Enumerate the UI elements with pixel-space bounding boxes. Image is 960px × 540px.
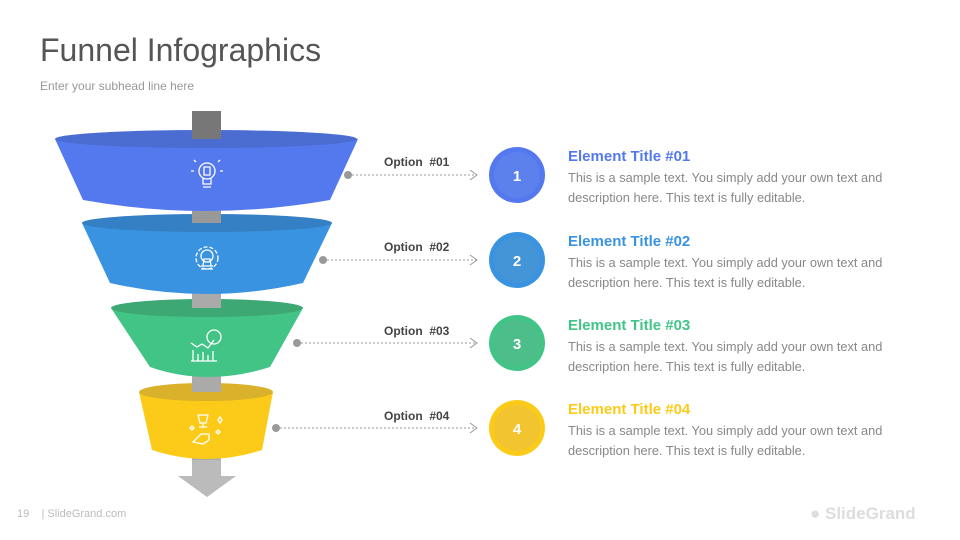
funnel level 1 — [55, 111, 358, 211]
icon: chart — [191, 330, 221, 361]
text: This is a sample text. You simply add your own text and description here. This text is fully editable. — [568, 255, 882, 290]
logo: ● SlideGrand — [810, 504, 916, 523]
title: Funnel Infographics — [40, 32, 321, 68]
text: Option #01 — [384, 155, 449, 169]
number circles: 2 — [513, 253, 521, 270]
number circles: 3 — [513, 336, 521, 353]
icon: trophy hand — [190, 415, 222, 444]
icon: lightbulb — [191, 160, 223, 187]
text: This is a sample text. You simply add your own text and description here. This text is fully editable. — [568, 339, 882, 374]
element 3 text — [568, 317, 882, 374]
icon: gear chess — [196, 247, 218, 269]
connectors — [272, 170, 477, 433]
pole — [192, 111, 221, 461]
element 2 text — [568, 233, 882, 290]
funnel level 3 — [111, 295, 303, 377]
text: Element Title #04 — [568, 401, 690, 418]
element 4 text — [568, 401, 882, 458]
text: Option #04 — [384, 409, 449, 423]
text: Element Title #01 — [568, 148, 690, 165]
arrow down — [178, 460, 236, 497]
text: This is a sample text. You simply add your own text and description here. This text is fully editable. — [568, 170, 882, 205]
option labels — [384, 155, 450, 423]
number circles — [489, 147, 545, 456]
text: Element Title #03 — [568, 317, 690, 334]
number circles: 1 — [513, 168, 521, 185]
funnel level 4 — [139, 378, 273, 459]
footer: 19 | SlideGrand.com — [17, 508, 126, 520]
text: Option #03 — [384, 324, 449, 338]
funnel level 2 — [82, 211, 332, 294]
number circles: 4 — [513, 421, 522, 438]
text: This is a sample text. You simply add your own text and description here. This text is fully editable. — [568, 423, 882, 458]
text: Option #02 — [384, 240, 449, 254]
subhead: Enter your subhead line here — [40, 79, 194, 93]
text: Element Title #02 — [568, 233, 690, 250]
element 1 text — [568, 148, 882, 205]
